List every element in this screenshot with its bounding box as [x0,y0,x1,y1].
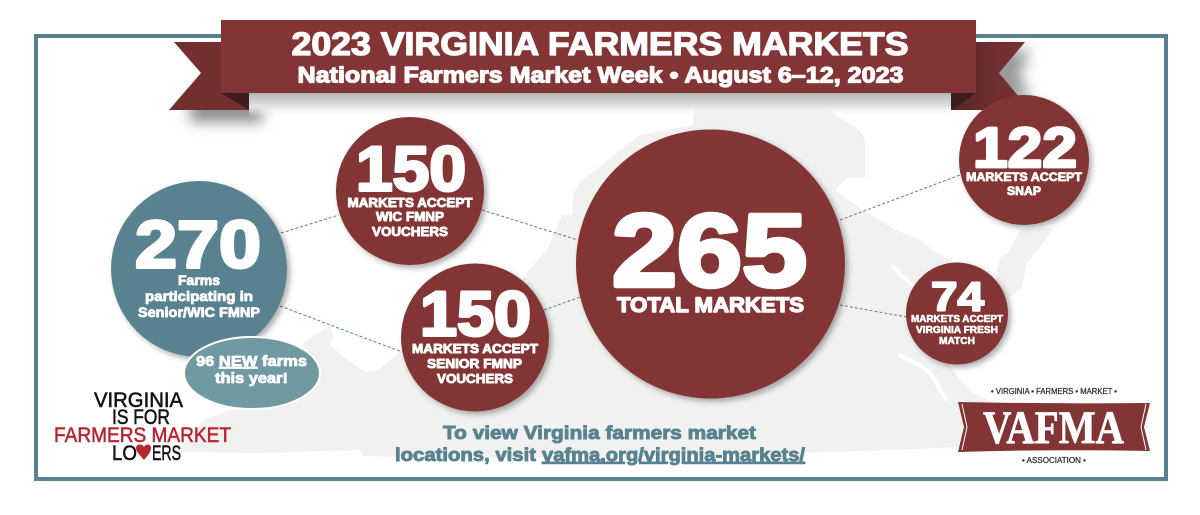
stat: 270 farms: 270 [135,208,261,282]
stat: 122 SNAP: MARKETS ACCEPT [966,170,1083,184]
stat: 74 Virginia Fresh Match: 74 [931,274,984,320]
callout: 96 new farms: this year! [215,370,288,387]
stat: 270 farms: Farms [178,272,220,288]
ribbon tail left [169,42,249,110]
logo: Virginia is for Farmers Market Lovers: VIRGINIA [94,389,183,412]
dashed connector lines [280,175,960,352]
callout: 96 new farms [184,337,320,409]
stat: 265 total markets [576,130,845,398]
call to action text: vafma.org/virginia-markets/ [542,444,805,465]
logo: Virginia is for Farmers Market Lovers [54,389,231,465]
stat: 150 senior FMNP: 150 [420,280,531,350]
stat: 270 farms [111,181,287,357]
stat: 150 WIC FMNP: 150 [356,134,466,204]
stat: 150 senior FMNP [401,264,549,412]
logo: VAFMA: • ASSOCIATION • [1022,456,1086,465]
stat: 122 SNAP: 122 [973,116,1077,180]
callout: 96 new farms: 96 NEW farms [196,353,307,370]
logo: VAFMA: VAFMA [983,402,1124,454]
title: 2023 VIRGINIA FARMERS MARKETS [292,26,908,62]
stat: 150 WIC FMNP: VOUCHERS [372,224,448,239]
logo: VAFMA [958,387,1150,465]
stat: 150 WIC FMNP [336,117,484,265]
stat: 265 total markets: 265 [612,193,807,308]
subtitle: National Farmers Market Week • August 6–12, 2023 [298,62,904,88]
title banner [221,20,976,93]
map of Virginia silhouette [178,93,1053,458]
logo: Virginia is for Farmers Market Lovers: ERS [152,442,181,465]
stat: 270 farms: Senior/WIC FMNP [138,304,260,320]
stat: 150 WIC FMNP: WIC FMNP [376,209,444,224]
stat: 74 Virginia Fresh Match: VIRGINIA FRESH [916,325,998,336]
call to action text: To view Virginia farmers market [443,422,756,443]
banner shadow [190,50,1030,122]
logo: VAFMA: • VIRGINIA • FARMERS • MARKET • [991,387,1117,396]
stat: 150 senior FMNP: SENIOR FMNP [427,356,522,371]
stat: 150 senior FMNP: MARKETS ACCEPT [412,341,538,356]
stat: 74 Virginia Fresh Match: MARKETS ACCEPT [911,314,1003,325]
stat: 270 farms: participating in [145,288,253,304]
ribbon tail right [951,42,1030,110]
call to action text [395,422,805,465]
logo: Virginia is for Farmers Market Lovers: LO [112,442,137,465]
logo: Virginia is for Farmers Market Lovers: FARMERS MARKET [54,424,231,447]
stat: 74 Virginia Fresh Match: MATCH [939,336,975,347]
stat: 122 SNAP [959,95,1089,225]
stat: 122 SNAP: SNAP [1007,184,1041,198]
stat: 265 total markets: TOTAL MARKETS [617,294,804,317]
stat: 150 senior FMNP: VOUCHERS [437,371,513,386]
logo: Virginia is for Farmers Market Lovers: IS FOR [112,406,170,429]
stat: 150 WIC FMNP: MARKETS ACCEPT [348,195,473,210]
call to action text: locations, visit [395,444,536,465]
stat: 74 Virginia Fresh Match [906,262,1008,364]
